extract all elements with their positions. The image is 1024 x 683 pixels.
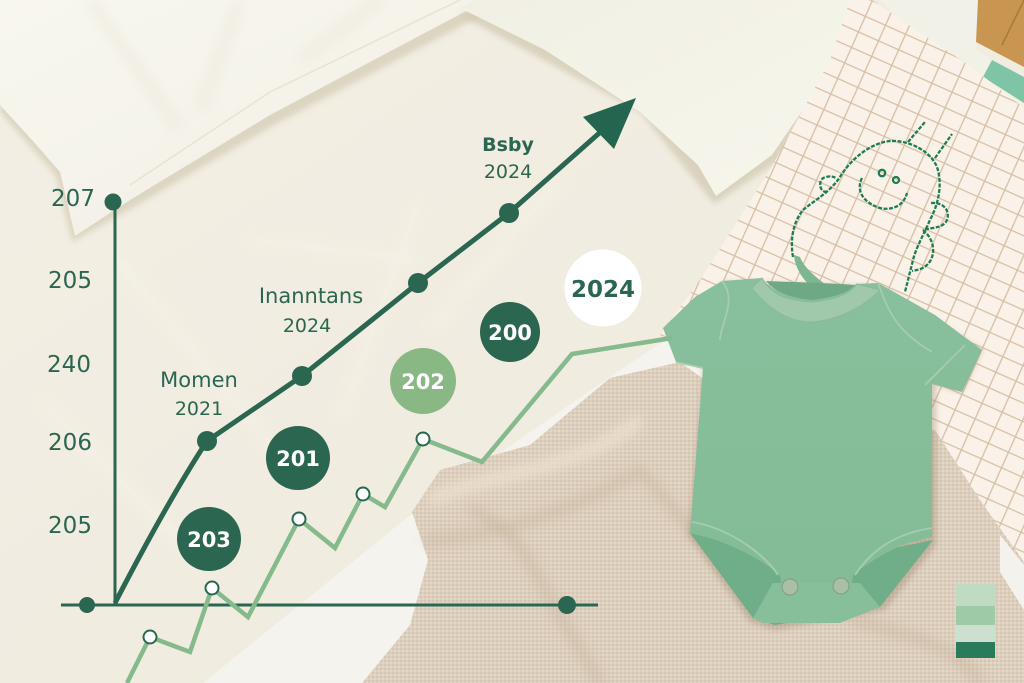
seams xyxy=(676,281,965,575)
palette swatches xyxy=(955,584,996,658)
milestone labels: Momen xyxy=(160,368,238,392)
y-axis labels: 205 xyxy=(48,513,92,539)
axes xyxy=(61,194,598,614)
blanket xyxy=(362,362,1024,683)
milestone labels xyxy=(160,134,535,420)
headboard and back pillow xyxy=(880,0,1024,120)
y-axis labels: 206 xyxy=(48,430,92,456)
year badge: 202: 202 xyxy=(401,370,445,394)
white strip at right xyxy=(1000,535,1024,610)
milestone labels: 2024 xyxy=(283,315,331,337)
light green line chart xyxy=(127,338,672,683)
y-axis labels: 240 xyxy=(47,352,91,378)
neck inner xyxy=(766,281,855,300)
baby bodysuit xyxy=(663,255,982,630)
plaid pillow xyxy=(660,0,1024,562)
milestone labels: Bsby xyxy=(482,134,535,156)
lower white sheet xyxy=(203,338,760,683)
y-axis labels: 205 xyxy=(48,268,92,294)
year badge: 200 xyxy=(480,302,540,362)
year badge: 203: 203 xyxy=(187,528,231,552)
neck collar xyxy=(752,278,880,322)
year badge: 202 xyxy=(390,348,456,414)
year badge: 201: 201 xyxy=(276,447,320,471)
y-axis labels: 207 xyxy=(51,186,95,212)
bodysuit back and leg openings xyxy=(690,533,933,625)
snap buttons xyxy=(782,578,849,595)
milestone labels: 2024 xyxy=(484,161,532,183)
pillow: top centre xyxy=(458,0,860,204)
year badge: 200: 200 xyxy=(488,321,532,345)
year badge: 201 xyxy=(266,426,330,490)
year badge: 2024 xyxy=(564,250,642,326)
hanger loop xyxy=(794,255,835,292)
dashed creature drawing xyxy=(792,122,952,292)
year badge: 203 xyxy=(177,507,241,571)
y-axis labels xyxy=(47,186,95,539)
milestone labels: Inanntans xyxy=(259,284,363,308)
year badge: 2024: 2024 xyxy=(571,277,635,303)
crotch panel xyxy=(753,583,880,623)
pillow: top left xyxy=(0,0,496,242)
bodysuit shadow xyxy=(666,282,982,630)
milestone labels: 2021 xyxy=(175,398,223,420)
bodysuit front xyxy=(663,278,982,597)
dark growth line with arrow xyxy=(115,98,636,603)
